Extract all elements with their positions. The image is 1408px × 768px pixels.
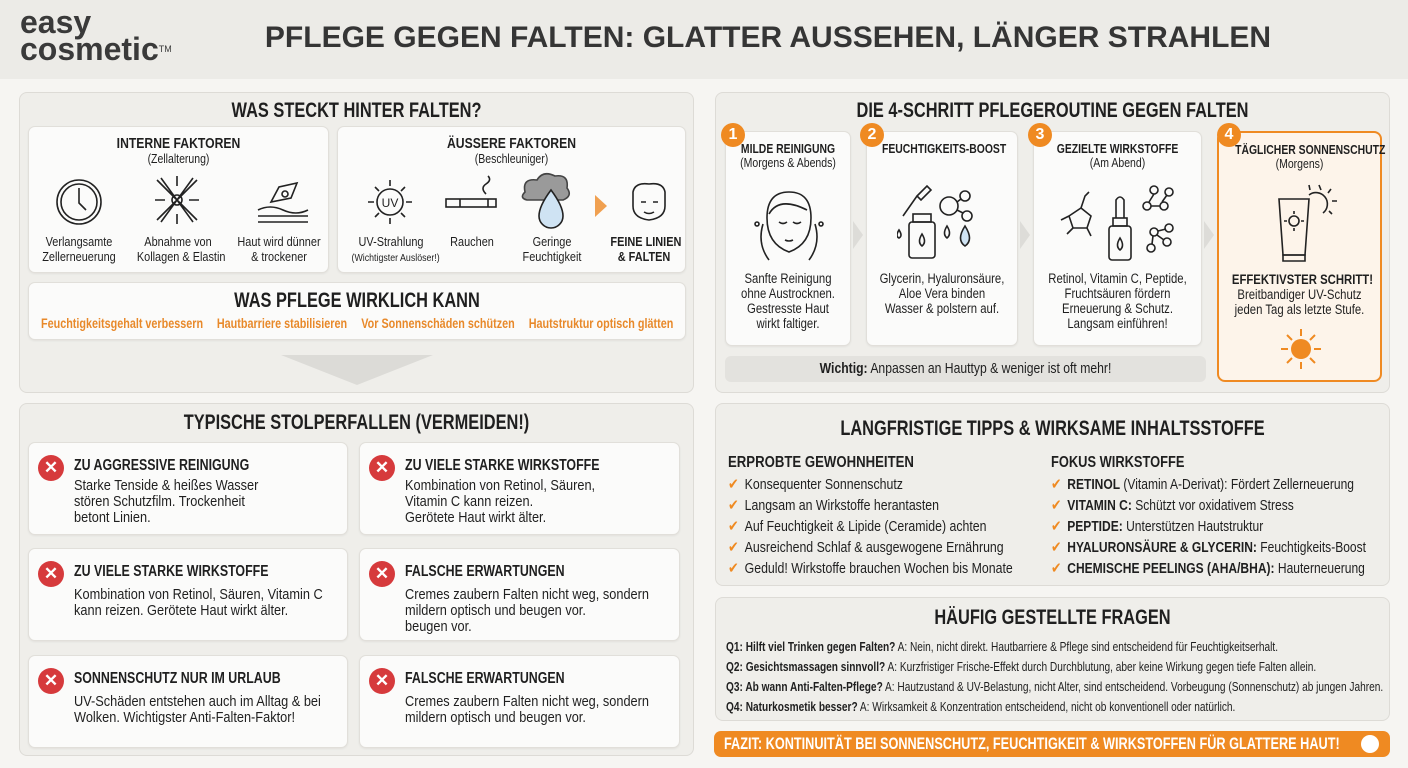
FAQ list: Q4: Naturkosmetik besser? A: Wirksamkeit & Konzentration entscheidend, nicht ob konventionell oder natürlich. xyxy=(726,700,1235,714)
card: what care can do: Hautbarriere stabilisieren xyxy=(217,316,347,331)
pitfall 2: Kombination von Retinol, Säuren, xyxy=(405,478,595,494)
heading: tips: LANGFRISTIGE TIPPS & WIRKSAME INHALTSSTOFFE xyxy=(840,417,1265,440)
heading: pitfalls: TYPISCHE STOLPERFALLEN (VERMEIDEN!) xyxy=(184,411,529,434)
list: ingredients: PEPTIDE: Unterstützen Hautstruktur xyxy=(1067,519,1263,535)
list: habits xyxy=(728,454,1013,577)
card: what care can do: Feuchtigkeitsgehalt verbessern xyxy=(41,316,203,331)
card: internal factors: Abnahme von xyxy=(144,234,212,249)
chevron xyxy=(1204,221,1214,249)
step 2: Aloe Vera binden xyxy=(899,286,985,301)
pitfall 3: ✕ xyxy=(44,564,58,583)
panel: FAQ xyxy=(715,597,1390,721)
step numbers: 1 xyxy=(729,126,737,143)
chevron xyxy=(1020,221,1030,249)
card: what care can do: WAS PFLEGE WIRKLICH KANN xyxy=(234,289,480,312)
pitfall 2: Gerötete Haut wirkt älter. xyxy=(405,510,546,526)
pitfall 6: FALSCHE ERWARTUNGEN xyxy=(405,670,565,687)
step 3 xyxy=(1033,131,1202,346)
step 1: (Morgens & Abends) xyxy=(740,156,836,170)
card: what care can do: Vor Sonnenschäden schützen xyxy=(361,316,515,331)
step 1: Sanfte Reinigung xyxy=(744,271,831,286)
step numbers xyxy=(721,123,745,147)
list: habits: Geduld! Wirkstoffe brauchen Wochen bis Monate xyxy=(745,561,1013,577)
step 4 (highlighted): (Morgens) xyxy=(1276,157,1323,171)
pitfall 3 xyxy=(28,548,348,641)
pitfall 4: FALSCHE ERWARTUNGEN xyxy=(405,563,565,580)
arrow: down xyxy=(281,355,433,385)
pitfall 1: ZU AGGRESSIVE REINIGUNG xyxy=(74,457,249,474)
heading: FAQ: HÄUFIG GESTELLTE FRAGEN xyxy=(934,606,1171,629)
logo: easy xyxy=(20,4,91,40)
pitfall 5: ✕ xyxy=(44,671,58,690)
title: PFLEGE GEGEN FALTEN: GLATTER AUSSEHEN, LÄNGER STRAHLEN xyxy=(265,21,1271,54)
step 4 (highlighted) xyxy=(1217,131,1382,382)
conclusion bar xyxy=(714,731,1390,757)
card: external factors: Rauchen xyxy=(450,234,494,249)
pitfall 6: ✕ xyxy=(375,671,389,690)
card: internal factors: (Zellalterung) xyxy=(148,152,209,166)
note bar xyxy=(725,356,1206,382)
pitfall 2 xyxy=(359,442,680,535)
header bar xyxy=(0,0,1408,79)
list: habits: ERPROBTE GEWOHNHEITEN xyxy=(728,454,914,471)
pitfall 5: SONNENSCHUTZ NUR IM URLAUB xyxy=(74,670,281,687)
pitfall 6 xyxy=(359,655,680,748)
card: internal factors: Zellerneuerung xyxy=(42,249,116,264)
list: ingredients: HYALURONSÄURE & GLYCERIN: Feuchtigkeits-Boost xyxy=(1067,540,1366,556)
card: external factors: (Beschleuniger) xyxy=(475,152,548,166)
list: ingredients: VITAMIN C: Schützt vor oxidativem Stress xyxy=(1067,498,1294,514)
card: internal factors: & trockener xyxy=(251,249,307,264)
FAQ list: Q2: Gesichtsmassagen sinnvoll? A: Kurzfristiger Frische-Effekt durch Durchblutung, aber keine Wirkung gegen tiefe Falten allein. xyxy=(726,660,1316,674)
card: internal factors: INTERNE FAKTOREN xyxy=(117,136,240,152)
FAQ list xyxy=(726,640,1383,714)
step 2: Wasser & polstern auf. xyxy=(885,301,999,316)
step 1: MILDE REINIGUNG xyxy=(741,141,835,156)
pitfall 4: beugen vor. xyxy=(405,619,472,635)
panel: routine: 3 xyxy=(1036,126,1044,143)
card: internal factors xyxy=(28,126,329,273)
step 2 xyxy=(866,131,1018,346)
step 3: (Am Abend) xyxy=(1090,156,1145,170)
logo: cosmeticTM xyxy=(20,31,172,67)
list: ingredients: RETINOL (Vitamin A-Derivat): Fördert Zellerneuerung xyxy=(1067,477,1354,493)
logo xyxy=(20,4,172,67)
icon: logo badge xyxy=(1361,735,1379,753)
pitfall 1: ✕ xyxy=(44,458,58,477)
icons: external xyxy=(368,172,666,229)
card: external factors: ÄUSSERE FAKTOREN xyxy=(447,136,576,152)
pitfall 4: mildern optisch und beugen vor. xyxy=(405,603,586,619)
step 3: GEZIELTE WIRKSTOFFE xyxy=(1057,141,1178,156)
panel: routine: 2 xyxy=(868,126,876,143)
step 2: FEUCHTIGKEITS-BOOST xyxy=(882,141,1006,156)
note bar: Wichtig: Anpassen an Hauttyp & weniger ist oft mehr! xyxy=(820,361,1111,377)
pitfall 6: mildern optisch und beugen vor. xyxy=(405,710,586,726)
pitfall 2: Vitamin C kann reizen. xyxy=(405,494,533,510)
panel: routine: 4 xyxy=(1225,126,1233,143)
pitfall 3: kann reizen. Gerötete Haut wirkt älter. xyxy=(74,603,288,619)
step 4 (highlighted): jeden Tag als letzte Stufe. xyxy=(1235,302,1364,317)
card: what care can do: Hautstruktur optisch glätten xyxy=(529,316,673,331)
pitfall 3: Kombination von Retinol, Säuren, Vitamin C xyxy=(74,587,323,603)
pitfall 2: ✕ xyxy=(375,458,389,477)
card: external factors: Geringe xyxy=(533,234,571,249)
list: habits: Auf Feuchtigkeit & Lipide (Ceramide) achten xyxy=(745,519,986,535)
card: internal factors: Kollagen & Elastin xyxy=(137,249,225,264)
pitfall 5 xyxy=(28,655,348,748)
heading: causes: WAS STECKT HINTER FALTEN? xyxy=(232,99,481,122)
card: internal factors: Verlangsamte xyxy=(46,234,112,249)
panel: causes xyxy=(19,92,694,393)
step 2: Glycerin, Hyaluronsäure, xyxy=(880,271,1004,286)
icons: external: UV xyxy=(382,196,398,210)
pitfall 4 xyxy=(359,548,680,641)
pitfall 1: Starke Tenside & heißes Wasser xyxy=(74,478,258,494)
step 4 (highlighted): EFFEKTIVSTER SCHRITT! xyxy=(1232,272,1373,287)
card: external factors: UV-Strahlung xyxy=(359,234,423,249)
list: ingredients: CHEMISCHE PEELINGS (AHA/BHA): Hauterneuerung xyxy=(1067,561,1365,577)
card: internal factors: Haut wird dünner xyxy=(237,234,321,249)
card: external factors: (Wichtigster Auslöser!) xyxy=(352,252,440,264)
step 4 (highlighted): TÄGLICHER SONNENSCHUTZ xyxy=(1235,142,1385,157)
card: what care can do xyxy=(28,282,686,340)
step 1: ohne Austrocknen. xyxy=(741,286,835,301)
FAQ list: Q1: Hilft viel Trinken gegen Falten? A: Nein, nicht direkt. Hautbarriere & Pflege sind entscheidend für Feuchtigkeitserhalt. xyxy=(726,640,1278,654)
heading: routine: DIE 4-SCHRITT PFLEGEROUTINE GEGEN FALTEN xyxy=(857,99,1248,122)
step 3: Retinol, Vitamin C, Peptide, xyxy=(1048,271,1187,286)
icons: internal xyxy=(56,176,308,225)
card: external factors: & FALTEN xyxy=(618,249,670,264)
pitfall 2: ZU VIELE STARKE WIRKSTOFFE xyxy=(405,457,600,474)
list: habits: Langsam an Wirkstoffe herantasten xyxy=(745,498,939,514)
panel: tips xyxy=(715,403,1390,586)
step 3: Langsam einführen! xyxy=(1067,316,1168,331)
card: external factors: FEINE LINIEN xyxy=(610,234,681,249)
pitfall 4: ✕ xyxy=(375,564,389,583)
pitfall 3: ZU VIELE STARKE WIRKSTOFFE xyxy=(74,563,269,580)
step 4 (highlighted): Breitbandiger UV-Schutz xyxy=(1237,287,1362,302)
pitfall 1 xyxy=(28,442,348,535)
pitfall 1: stören Schutzfilm. Trockenheit xyxy=(74,494,245,510)
step 1: wirkt faltiger. xyxy=(756,316,820,331)
list: ingredients: FOKUS WIRKSTOFFE xyxy=(1051,454,1184,471)
FAQ list: Q3: Ab wann Anti-Falten-Pflege? A: Hautzustand & UV-Belastung, nicht Alter, sind entscheidend. Vorbeugung (Sonnenschutz) ab jungen Jahren. xyxy=(726,680,1383,694)
panel: pitfalls xyxy=(19,403,694,756)
pitfall 5: UV-Schäden entstehen auch im Alltag & bei xyxy=(74,694,321,710)
step 1: Gestresste Haut xyxy=(747,301,829,316)
step 1 xyxy=(725,131,851,346)
pitfall 1: betont Linien. xyxy=(74,510,151,526)
icon: sun xyxy=(1281,329,1321,369)
chevron xyxy=(853,221,863,249)
pitfall 6: Cremes zaubern Falten nicht weg, sondern xyxy=(405,694,649,710)
arrow: to wrinkles xyxy=(595,195,607,217)
card: external factors xyxy=(337,126,686,273)
step 3: Erneuerung & Schutz. xyxy=(1062,301,1173,316)
list: habits: Ausreichend Schlaf & ausgewogene Ernährung xyxy=(745,540,1004,556)
panel: routine xyxy=(715,92,1390,393)
step 3: Fruchtsäuren fördern xyxy=(1065,286,1170,301)
list: ingredients xyxy=(1051,454,1366,577)
conclusion bar: FAZIT: KONTINUITÄT BEI SONNENSCHUTZ, FEUCHTIGKEIT & WIRKSTOFFEN FÜR GLATTERE HAUT! xyxy=(724,735,1340,753)
pitfall 5: Wolken. Wichtigster Anti-Falten-Faktor! xyxy=(74,710,295,726)
pitfall 4: Cremes zaubern Falten nicht weg, sondern xyxy=(405,587,649,603)
list: habits: Konsequenter Sonnenschutz xyxy=(745,477,903,493)
card: external factors: Feuchtigkeit xyxy=(523,249,581,264)
